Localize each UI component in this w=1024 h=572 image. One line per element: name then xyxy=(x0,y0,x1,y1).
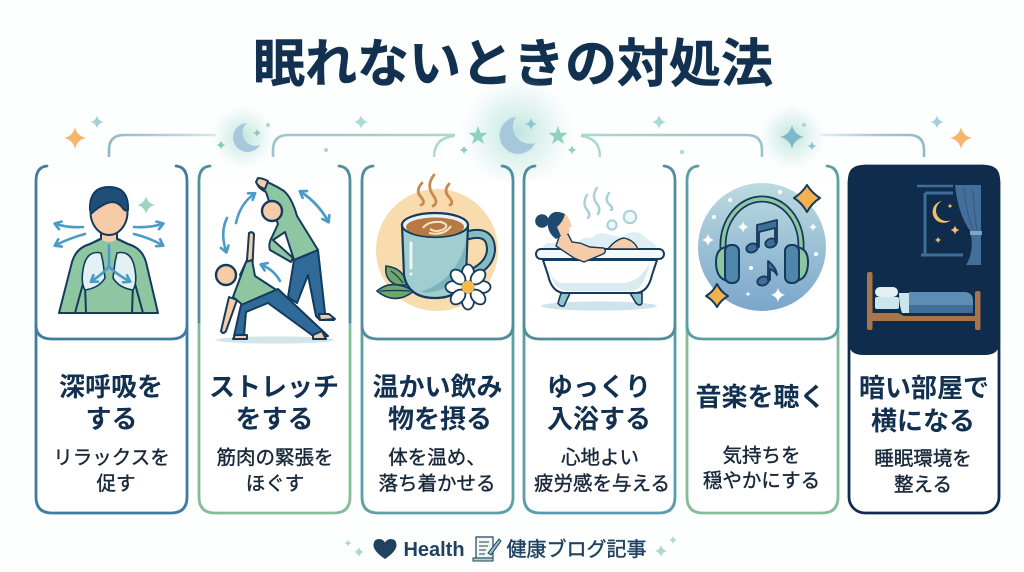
heading: 音楽を聴く xyxy=(695,382,826,412)
icon: heart xyxy=(373,539,397,559)
icon: scroll and pen xyxy=(473,537,501,561)
panel: ストレッチをする: をする xyxy=(235,404,314,434)
panel: 深呼吸をする xyxy=(36,166,187,513)
panel: 深呼吸をする: する xyxy=(85,404,138,434)
panel: 温かい飲み物を摂る xyxy=(362,166,513,513)
description: 睡眠環境を xyxy=(874,448,972,470)
panel: ゆっくり入浴する: 入浴する xyxy=(547,404,651,434)
panel: ゆっくり入浴する xyxy=(524,166,675,513)
sparkles xyxy=(344,536,677,557)
icon: warm drink xyxy=(376,175,498,311)
panel: ストレッチをする: ほぐす xyxy=(246,473,304,495)
panel: 深呼吸をする: 促す xyxy=(96,473,136,495)
footer label: Health: Health xyxy=(403,539,465,561)
panel: ゆっくり入浴する: 疲労感を与える xyxy=(534,473,670,495)
description: リラックスを xyxy=(53,447,170,469)
icon: night window and bed xyxy=(867,185,982,330)
description: 心地よい xyxy=(561,447,639,469)
icon: stretching figures xyxy=(216,178,335,344)
panel: 暗い部屋で横になる: 横になる xyxy=(871,406,975,436)
panel: 音楽を聴く xyxy=(687,166,838,513)
footer label: 健康ブログ記事: 健康ブログ記事 xyxy=(506,537,646,561)
description: 体を温め、 xyxy=(388,447,486,469)
description: 筋肉の緊張を xyxy=(216,447,334,469)
icon: headphones and music xyxy=(698,183,826,311)
heading: 深呼吸を xyxy=(59,372,163,402)
heading: 暗い部屋で xyxy=(859,373,989,403)
heading: ストレッチ xyxy=(209,372,339,402)
decorative night sky header xyxy=(64,77,972,189)
icon: person breathing xyxy=(59,187,158,313)
panel: 暗い部屋で横になる: 整える xyxy=(894,474,952,496)
icon: bath xyxy=(535,188,664,311)
heading: ゆっくり xyxy=(547,372,651,402)
panel: ストレッチをする xyxy=(199,166,350,513)
panel: 温かい飲み物を摂る: 落ち着かせる xyxy=(378,473,496,495)
panel: 温かい飲み物を摂る: 物を摂る xyxy=(388,404,492,434)
panel: 暗い部屋で横になる xyxy=(848,165,1000,513)
footer xyxy=(344,536,677,561)
title: 眠れないときの対処法 xyxy=(253,36,773,94)
description: 気持ちを xyxy=(722,445,801,467)
panel: 音楽を聴く: 穏やかにする xyxy=(703,470,820,492)
heading: 温かい飲み xyxy=(372,372,503,402)
